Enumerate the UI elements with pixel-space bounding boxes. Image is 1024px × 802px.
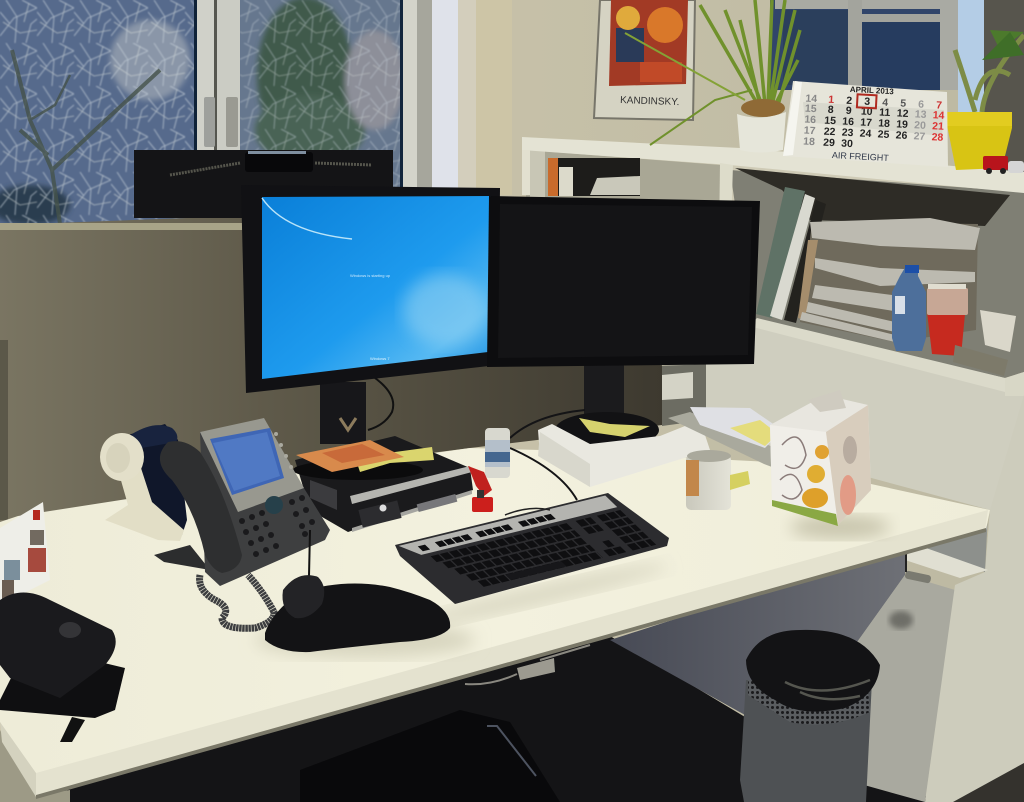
desk calendar: 17 <box>860 116 872 129</box>
desk calendar: 18 <box>803 136 815 148</box>
desk calendar: 19 <box>896 118 908 131</box>
desk calendar: 2 <box>846 95 853 107</box>
water bottle <box>892 265 926 351</box>
coffee mug <box>686 450 750 510</box>
label tape dispenser <box>100 424 187 541</box>
paper box under right monitor <box>538 420 710 487</box>
desk calendar: 8 <box>828 104 834 116</box>
desk calendar: 16 <box>842 116 854 128</box>
decorated tissue box <box>770 390 871 526</box>
desk calendar: 29 <box>823 137 835 149</box>
desk calendar: 24 <box>859 127 872 140</box>
desk calendar: 15 <box>824 115 836 127</box>
brochure <box>0 502 50 605</box>
second monitor behind partition <box>134 150 393 218</box>
poster: Kandinsky: KANDINSKY. <box>620 95 680 108</box>
desk calendar: 3 <box>864 96 871 108</box>
desk calendar: 13 <box>914 108 927 121</box>
desk calendar: 10 <box>861 106 873 118</box>
desk calendar: 21 <box>932 120 944 133</box>
cups and tissue on shelf <box>927 284 1016 376</box>
binders and paper stacks <box>756 187 980 342</box>
desk calendar: 9 <box>845 105 852 117</box>
books on shelf left <box>548 158 640 196</box>
IP phone <box>154 418 330 586</box>
desk calendar: 11 <box>879 106 891 119</box>
desk surface <box>0 448 990 799</box>
orange folder and sticky notes <box>293 440 434 480</box>
left monitor with desktop: Windows is starting up <box>350 273 391 278</box>
desk calendar: 14 <box>932 109 945 122</box>
mouse <box>282 575 324 618</box>
keyboard <box>395 493 669 604</box>
waste bin <box>740 630 880 802</box>
desk calendar: 7 <box>936 99 942 112</box>
desk calendar: 1 <box>828 94 835 106</box>
medicine bottle <box>485 428 510 478</box>
hole punch <box>0 592 125 742</box>
desk calendar: 23 <box>841 127 854 139</box>
red stapler <box>468 466 493 512</box>
mini PC <box>295 436 473 532</box>
desk calendar: 4 <box>882 97 889 109</box>
desk calendar: 16 <box>804 114 816 126</box>
desk calendar: APRIL 2013 <box>850 85 894 96</box>
monitor stand: right <box>555 362 659 448</box>
mouse pad <box>265 583 450 652</box>
left monitor with desktop <box>241 185 500 393</box>
desk calendar: 14 <box>805 93 818 105</box>
desk calendar: 28 <box>931 131 944 144</box>
toy bus and car <box>983 156 1024 174</box>
cables behind desk <box>510 410 585 500</box>
shelf unit <box>522 137 1024 802</box>
plant in white pot <box>625 0 800 152</box>
desk calendar: 15 <box>805 103 817 115</box>
under-desk cabinet <box>465 395 1024 802</box>
desk calendar: 18 <box>878 117 890 130</box>
desk calendar: 22 <box>823 126 836 138</box>
right window <box>770 0 1024 175</box>
desk calendar: 5 <box>900 98 907 110</box>
desk calendar: 6 <box>918 99 925 111</box>
desk calendar: 20 <box>914 119 926 132</box>
phone coiled cord <box>200 575 274 628</box>
desk calendar: 12 <box>896 107 909 120</box>
plant in yellow pot <box>944 30 1024 170</box>
desk calendar: 30 <box>841 138 853 150</box>
desk calendar: 26 <box>895 129 908 142</box>
desk calendar <box>783 81 948 167</box>
floor and under-desk area <box>0 630 940 802</box>
desk calendar: 27 <box>913 130 926 143</box>
poster: Kandinsky <box>594 0 695 120</box>
monitor stand: left <box>320 378 393 444</box>
desk calendar: AIR FREIGHT <box>832 150 890 163</box>
documents on desk <box>668 407 782 470</box>
window with trees <box>0 0 512 226</box>
right monitor off <box>487 196 760 367</box>
desk calendar: 17 <box>803 125 816 137</box>
cubicle back partition <box>0 216 662 522</box>
left monitor with desktop: Windows 7 <box>370 356 390 361</box>
desk calendar: 25 <box>877 128 890 141</box>
